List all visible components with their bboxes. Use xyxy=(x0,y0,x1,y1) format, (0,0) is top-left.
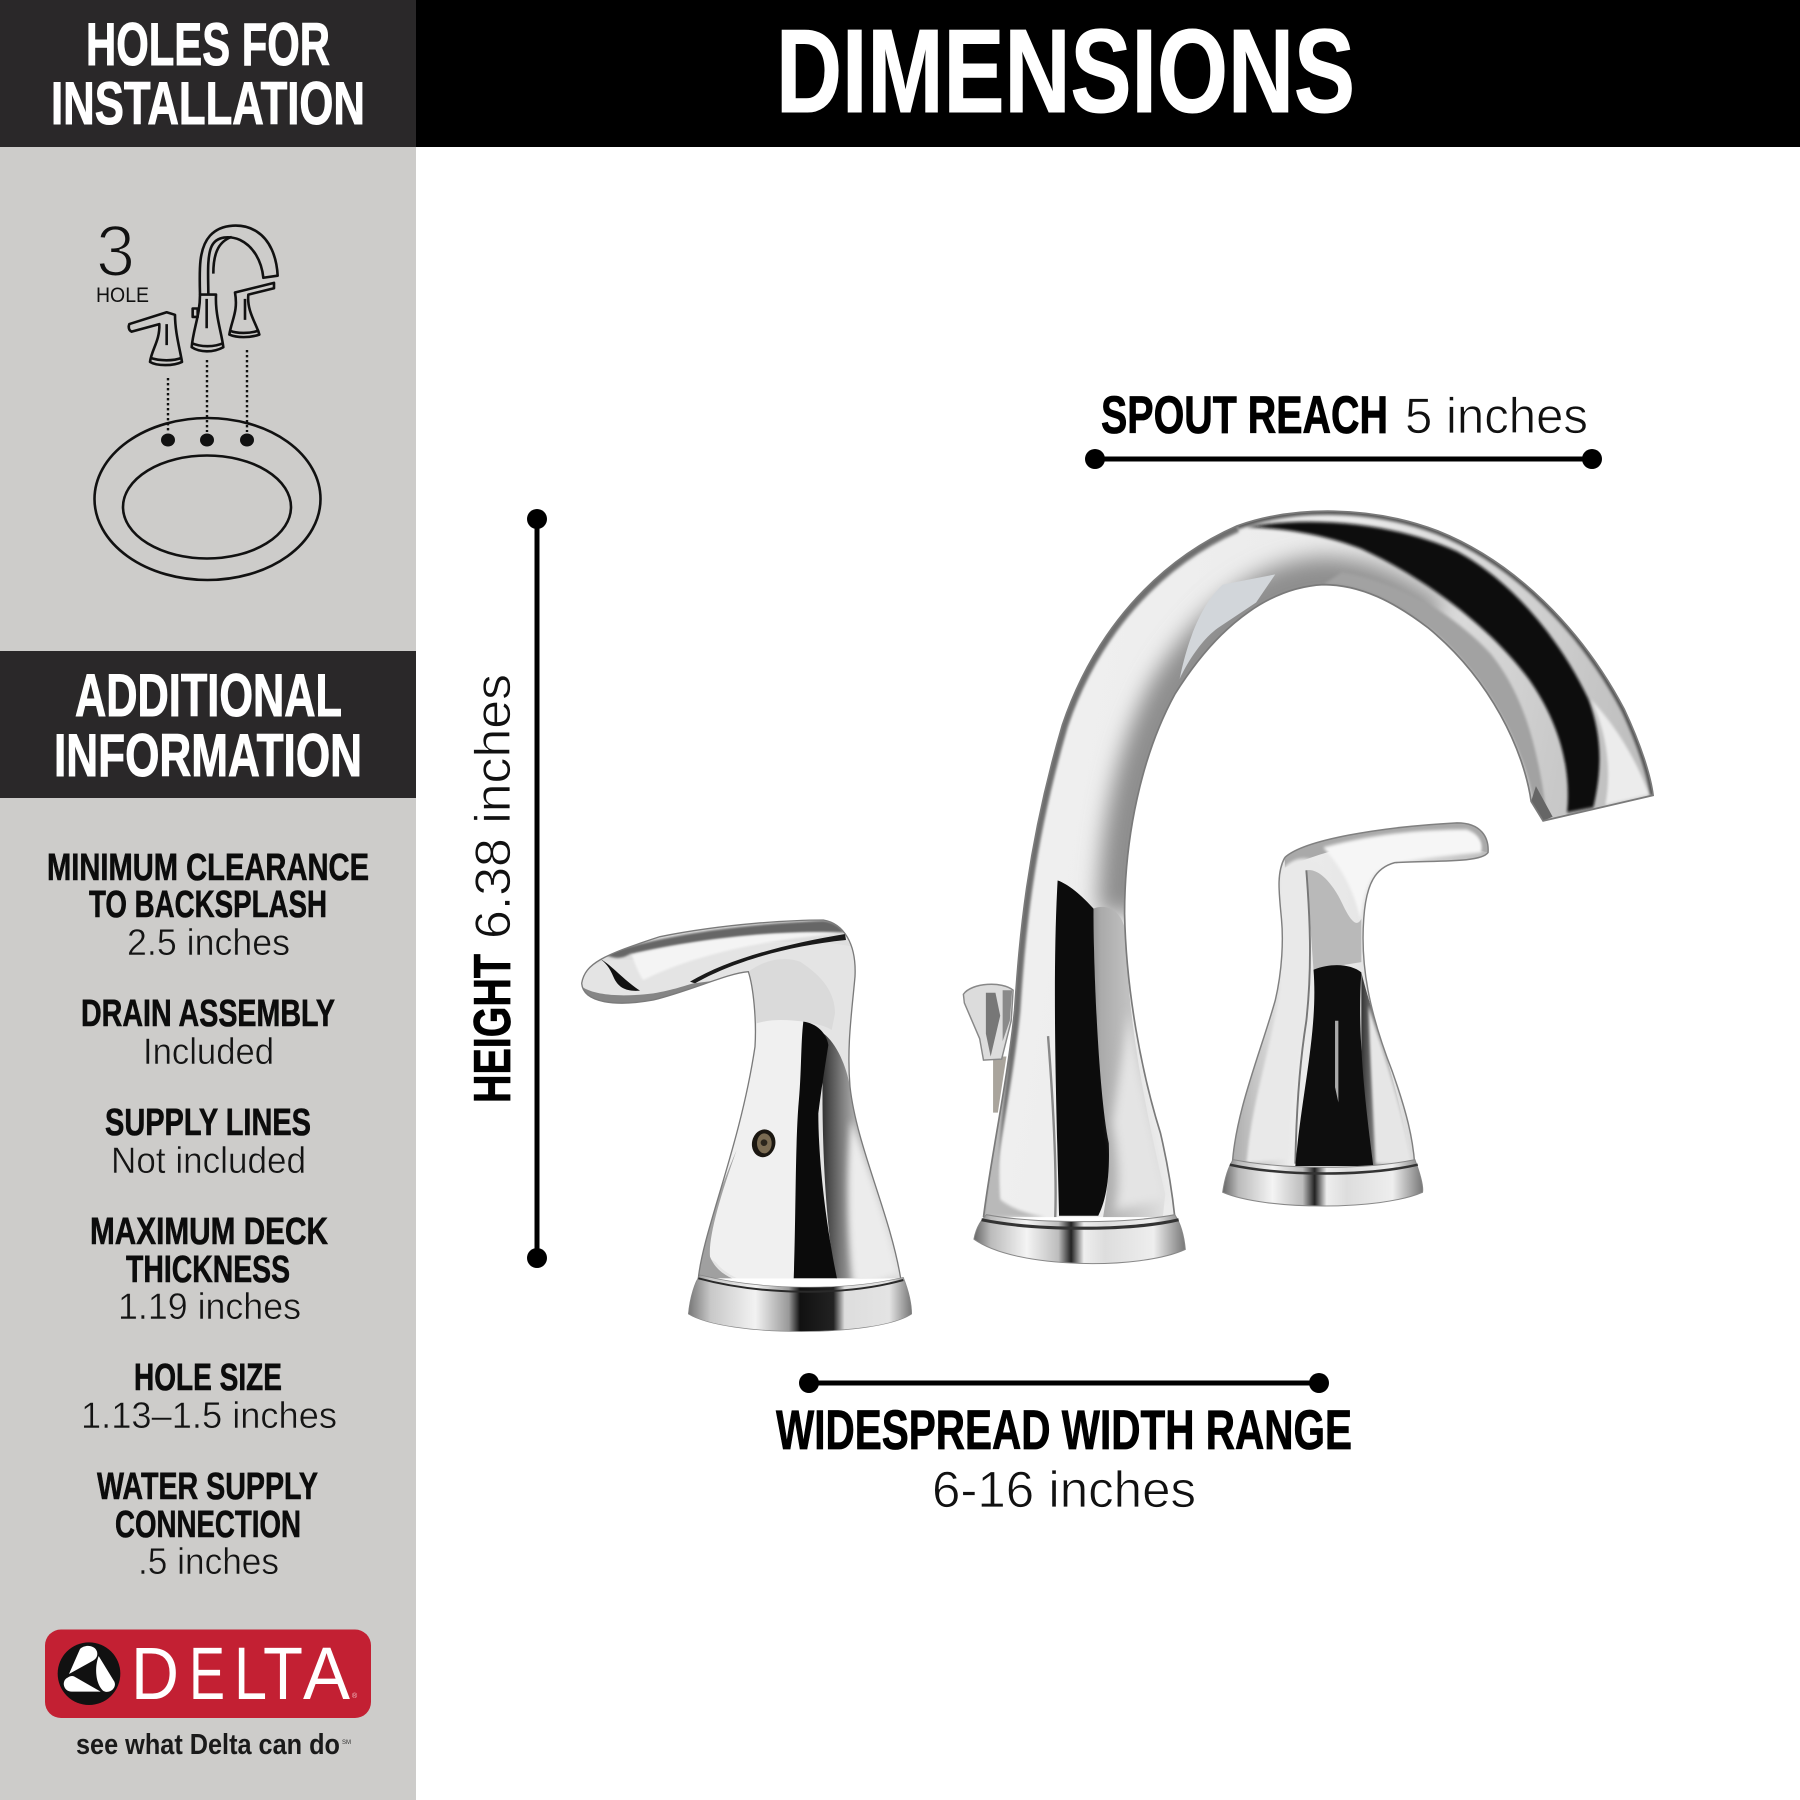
spout base ring xyxy=(974,1215,1185,1264)
spec: hole size: 1.13–1.5 inches xyxy=(81,1395,337,1436)
dimension: height: 6.38 inches xyxy=(465,674,521,939)
product photo: chrome faucet xyxy=(573,480,1667,1331)
spec: supply lines xyxy=(105,1102,311,1181)
grey shading on inner curve xyxy=(1125,585,1428,914)
dimension: widespread width range: 6-16 inches xyxy=(932,1461,1196,1518)
spec: drain assembly: DRAIN ASSEMBLY xyxy=(81,993,335,1035)
spec: maximum deck thickness: 1.19 inches xyxy=(118,1286,301,1327)
spec: minimum clearance xyxy=(47,847,369,963)
logo: delta: ® xyxy=(352,1692,358,1700)
spec: drain assembly xyxy=(81,993,335,1072)
spout body xyxy=(984,512,1652,1218)
number 3 label: 3 xyxy=(96,212,135,292)
heading: holes for installation xyxy=(0,0,416,147)
dimension: spout reach: 5 inches xyxy=(1405,388,1588,444)
spec: minimum clearance: TO BACKSPLASH xyxy=(89,884,327,926)
spec: drain assembly: Included xyxy=(143,1031,274,1072)
spec: hole size xyxy=(81,1357,337,1436)
drain knob xyxy=(963,984,1013,1113)
dimension: height: HEIGHT xyxy=(464,954,522,1103)
header bar: dimensions xyxy=(416,0,1800,147)
dimension: widespread width range: WIDESPREAD WIDTH RANGE xyxy=(776,1398,1352,1461)
handle base ring xyxy=(688,1275,912,1331)
spec: minimum clearance: 2.5 inches xyxy=(127,922,290,963)
spec: supply lines: Not included xyxy=(111,1140,306,1181)
wordmark: A xyxy=(303,1632,351,1715)
spec: water supply connection xyxy=(97,1466,318,1582)
title: DIMENSIONS xyxy=(776,5,1355,138)
heading: additional information: INFORMATION xyxy=(54,722,362,789)
spec: maximum deck thickness: THICKNESS xyxy=(126,1249,290,1291)
logo: delta: SM xyxy=(342,1740,351,1746)
spec: maximum deck thickness xyxy=(90,1211,328,1327)
left handle xyxy=(573,913,912,1331)
spec: supply lines: SUPPLY LINES xyxy=(105,1102,311,1144)
right handle outline xyxy=(1232,823,1488,1166)
heading: additional information: ADDITIONAL xyxy=(75,662,342,729)
spec: water supply connection: .5 inches xyxy=(138,1541,279,1582)
outer edge shading xyxy=(983,526,1237,1217)
spec: maximum deck thickness: MAXIMUM DECK xyxy=(90,1211,328,1253)
heading: holes for installation: INSTALLATION xyxy=(51,70,365,137)
tagline: see what Delta can do xyxy=(76,1729,340,1761)
right handle xyxy=(1218,812,1505,1206)
wordmark: L xyxy=(234,1632,267,1715)
dimension: widespread width range xyxy=(776,1373,1352,1518)
wordmark: T xyxy=(263,1632,303,1715)
heading: additional information xyxy=(0,651,416,798)
dimension: height xyxy=(464,509,547,1268)
hole label: HOLE xyxy=(96,284,149,307)
logo: delta xyxy=(45,1630,371,1761)
wordmark xyxy=(131,1632,351,1715)
spec: water supply connection: CONNECTION xyxy=(115,1504,301,1546)
dotted guide lines xyxy=(168,350,247,432)
spout and drain lift rod xyxy=(950,480,1667,1264)
icon: delta emblem xyxy=(58,1642,120,1705)
dark reflection on column xyxy=(1058,881,1165,1217)
spec: water supply connection: WATER SUPPLY xyxy=(97,1466,318,1508)
set screw hole xyxy=(749,1127,778,1159)
panel: sidebar xyxy=(0,147,416,1800)
dimension: spout reach xyxy=(1085,386,1602,469)
dimension: spout reach: SPOUT REACH xyxy=(1101,386,1388,445)
sink outline xyxy=(94,418,320,580)
heading: holes for installation: HOLES FOR xyxy=(86,11,330,78)
icon: three hole installation diagram xyxy=(94,212,320,580)
left handle outline xyxy=(582,920,901,1278)
wordmark: D xyxy=(131,1632,179,1715)
dark reflection on arch xyxy=(1247,522,1600,813)
spec: hole size: HOLE SIZE xyxy=(134,1357,282,1399)
icon: faucet line drawing xyxy=(129,226,278,365)
spout outline xyxy=(983,511,1653,1217)
spec: minimum clearance: MINIMUM CLEARANCE xyxy=(47,847,369,889)
wordmark: E xyxy=(189,1632,225,1715)
